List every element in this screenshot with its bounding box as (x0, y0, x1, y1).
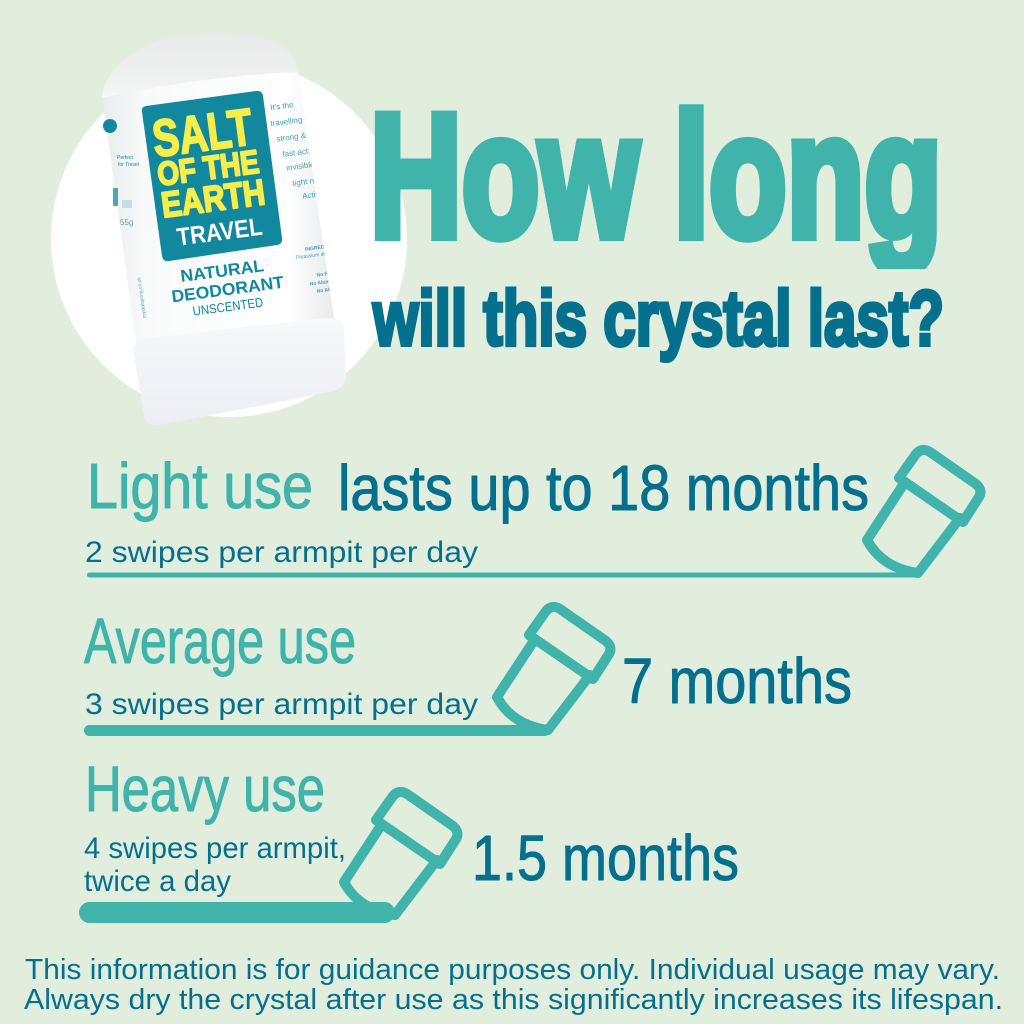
brand name (149, 98, 267, 225)
side copy: Active (302, 189, 325, 201)
product name: DEODORANT (170, 273, 286, 306)
duration: 18 months: lasts up to 18 months (338, 452, 869, 524)
side copy: INGREDIENTS (305, 242, 340, 253)
footnote (24, 954, 1003, 1016)
product name (168, 254, 287, 321)
label text (149, 98, 271, 253)
side copy: tight no (292, 176, 320, 188)
side copy (270, 102, 330, 293)
detail text: 4 swipes per armpit, (84, 832, 346, 865)
detail text: 3 swipes per armpit per day (85, 688, 478, 721)
left side icons: crystalspring.co.uk (136, 276, 148, 319)
left side icons (103, 119, 148, 319)
product: crystal deodorant (102, 32, 346, 425)
brand name: SALT (149, 98, 256, 169)
detail text: 2 swipes per armpit per day (85, 536, 478, 569)
row: heavy use (79, 753, 739, 923)
side copy: No Alum (309, 279, 331, 288)
row: light use (85, 450, 980, 578)
title (370, 79, 944, 362)
side copy: Potassium alum (296, 251, 332, 261)
white circle behind product (51, 61, 407, 417)
left side icons: for Travel (118, 162, 139, 168)
side copy: No Alco (316, 286, 336, 295)
row: average use (84, 605, 852, 736)
heading: heavy use: Heavy use (85, 753, 325, 825)
crystal body (102, 65, 334, 350)
duration: 7 months: 7 months (622, 645, 852, 717)
side copy: travelling (270, 115, 303, 128)
product name: NATURAL (179, 256, 265, 286)
crystal dome (102, 32, 298, 98)
side copy: strong & (276, 131, 307, 144)
product name: UNSCENTED (192, 295, 264, 319)
usage line (79, 902, 395, 923)
left side icons: 55g (120, 218, 133, 227)
side copy: No Fr (316, 271, 330, 279)
brand name: OF THE (155, 143, 261, 193)
usage line (87, 572, 917, 578)
left side icons: Perfect (117, 155, 133, 161)
duration: 1.5 months: 1.5 months (472, 822, 739, 894)
detail text (84, 832, 346, 898)
travel: TRAVEL (175, 213, 264, 252)
usage line (84, 725, 550, 736)
icon: crystal (867, 450, 980, 573)
footnote: This information is for guidance purposes only. Individual usage may vary. (25, 954, 1000, 986)
base cap (133, 318, 346, 425)
teal label (142, 91, 282, 261)
detail text: twice a day (84, 865, 231, 898)
footnote: Always dry the crystal after use as this significantly increases its lifespan. (24, 984, 1003, 1016)
brand name: EARTH (159, 171, 267, 225)
heading: average use: Average use (84, 605, 356, 677)
side copy: invisible (286, 160, 316, 173)
icon: crystal (497, 607, 610, 730)
heading: light use: Light use (87, 450, 313, 522)
icon: crystal (344, 792, 457, 915)
side copy: It's the (270, 100, 295, 112)
side copy: fast act (282, 147, 309, 159)
